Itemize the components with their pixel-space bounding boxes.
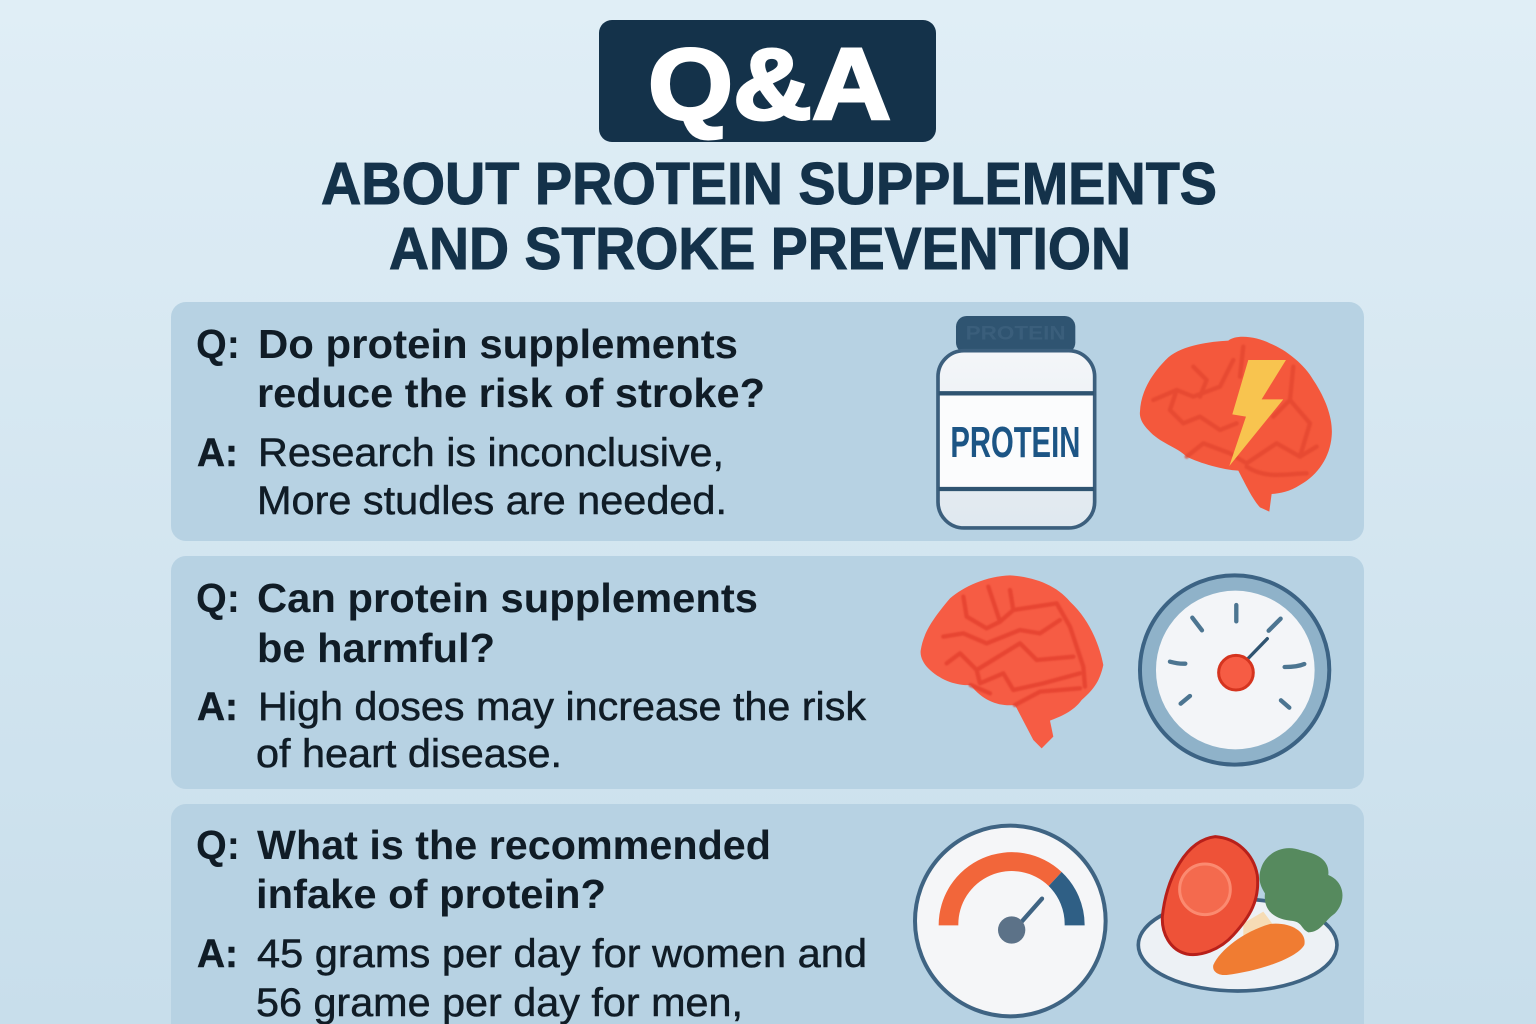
icon: protein jar: PROTEIN	[950, 418, 1080, 467]
question 1: reduce the risk of stroke?	[257, 370, 765, 416]
question 3: infake of protein?	[256, 871, 606, 917]
icon: protein jar: PROTEIN	[966, 323, 1066, 344]
answer 2	[197, 685, 867, 776]
panel: can protein supplements be harmful	[171, 556, 1364, 789]
title badge: Q&A	[599, 20, 936, 142]
question 2: Can protein supplements	[257, 575, 758, 621]
question 3: What is the recommended	[257, 822, 771, 868]
question 1: Do protein supplements	[258, 321, 738, 367]
question 3	[196, 822, 771, 917]
question 2: be harmful?	[257, 625, 495, 671]
answer 2: of heart disease.	[256, 732, 562, 776]
question 2: Q:	[196, 575, 240, 621]
panel: recommended protein intake	[171, 804, 1364, 1024]
panel: do protein supplements reduce stroke risk	[171, 302, 1364, 541]
answer 1: More studles are needed.	[257, 479, 727, 523]
icon: intake gauge	[915, 826, 1106, 1016]
icon: brain with lightning bolt	[1140, 337, 1332, 512]
icon: plate with meat, broccoli and carrot	[1138, 837, 1342, 991]
question 2	[196, 575, 758, 671]
title badge: Q&A: Q&A	[648, 29, 891, 141]
answer 3: 45 grams per day for women and	[257, 932, 867, 976]
answer 1: A:	[197, 431, 238, 475]
answer 2: High doses may increase the risk	[258, 685, 867, 729]
question 1	[196, 321, 765, 416]
icon: dial gauge with red hub	[1140, 575, 1329, 765]
answer 2: A:	[197, 685, 238, 729]
answer 3: 56 grame per day for men,	[256, 981, 743, 1024]
question 3: Q:	[196, 822, 240, 868]
heading: about protein supplements and stroke prevention: AND STROKE PREVENTION	[389, 216, 1131, 282]
icon: protein jar	[938, 316, 1095, 528]
answer 3	[197, 932, 867, 1024]
icon: brain	[921, 575, 1103, 748]
heading: about protein supplements and stroke prevention: ABOUT PROTEIN SUPPLEMENTS	[321, 151, 1217, 217]
heading: about protein supplements and stroke prevention	[321, 151, 1217, 282]
answer 1: Research is inconclusive,	[258, 431, 724, 475]
answer 1	[197, 431, 727, 523]
question 1: Q:	[196, 321, 240, 367]
answer 3: A:	[197, 932, 238, 976]
